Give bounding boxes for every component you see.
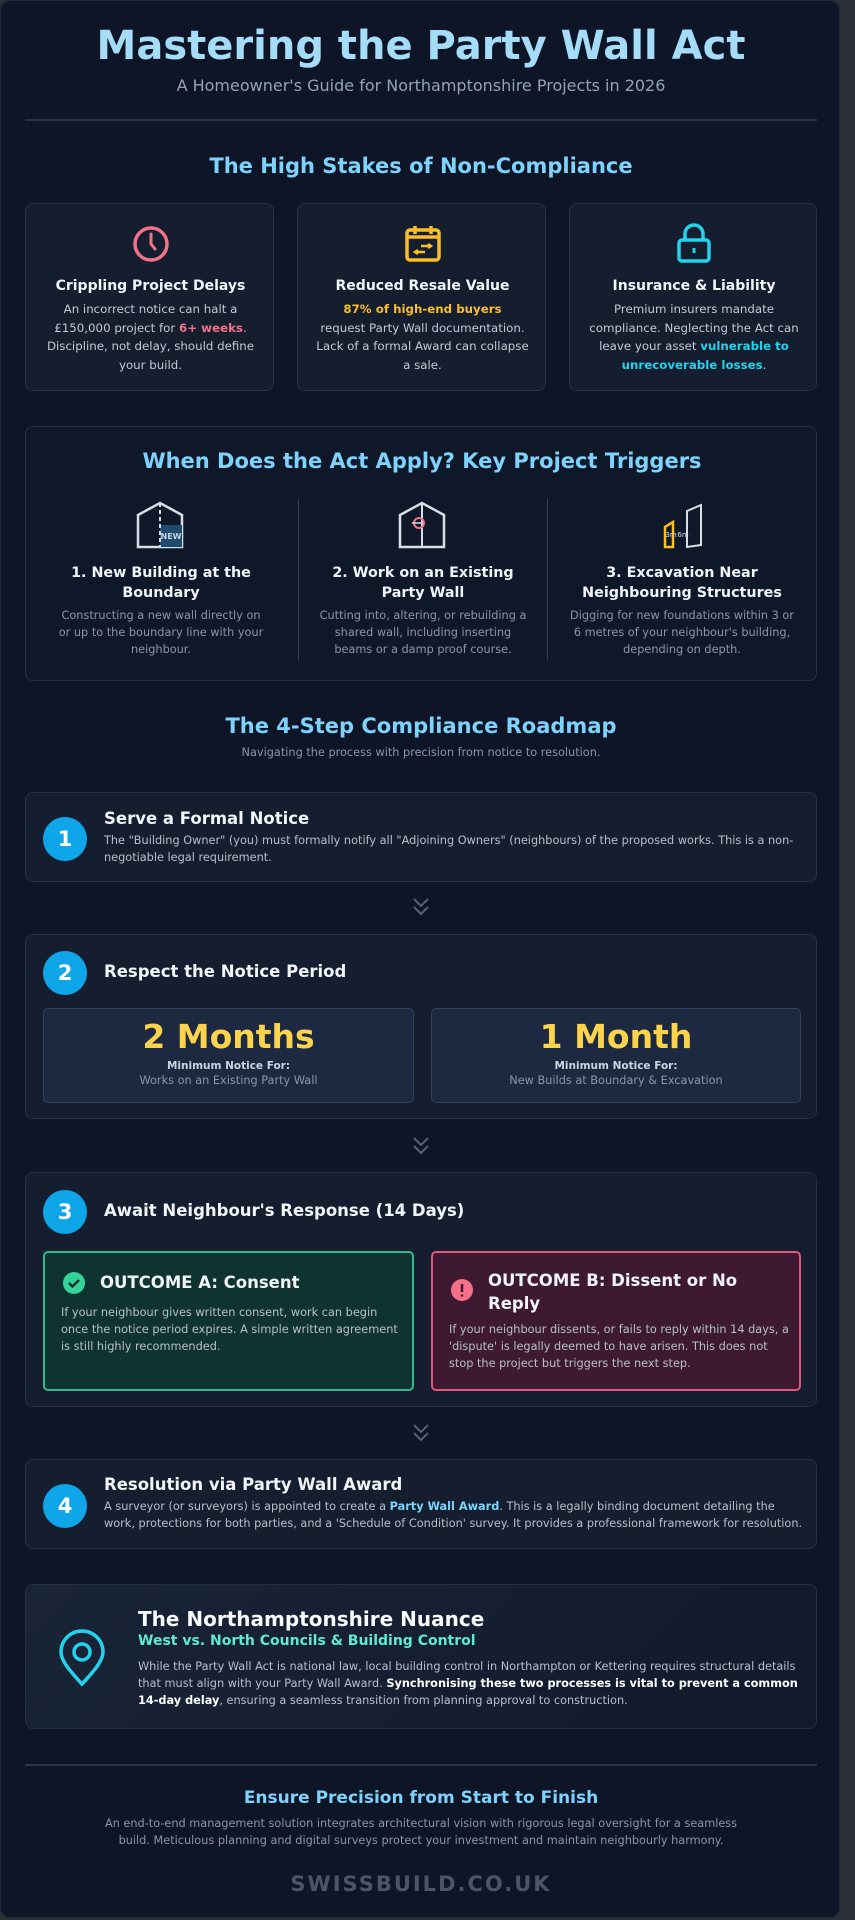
closing text: An end-to-end management solution integrates architectural vision with rigorous legal oversight for a seamless build. Meticulous planning and digital surveys protect your investment and maintain neighbourly harmony. (105, 1817, 737, 1847)
step 1 (25, 792, 817, 882)
step 2 (25, 934, 817, 1119)
icon: padlock (677, 223, 711, 263)
panel: resale: request Party Wall documentation. Lack of a formal Award can collapse a sale. (316, 320, 529, 372)
heading: roadmap: The 4-Step Compliance Roadmap (225, 714, 617, 738)
outcome B (431, 1251, 801, 1391)
icon: new building (136, 502, 184, 548)
panel: resale (297, 203, 546, 391)
trigger 2: 2. Work on an Existing Party Wall (332, 565, 514, 601)
panel: resale: 87% of high-end buyers (343, 302, 502, 316)
trigger 3: 3. Excavation Near Neighbouring Structures (582, 565, 782, 601)
icon: alert (451, 1279, 473, 1301)
heading: triggers: When Does the Act Apply? Key Project Triggers (142, 449, 702, 473)
panel: insurance: Premium insurers mandate compliance. Neglecting the Act can leave your asset vulnerable to unrecoverable losses. (589, 302, 799, 372)
icon: clock (133, 226, 169, 262)
trigger 1: Constructing a new wall directly on or up to the boundary line with your neighbour. (59, 609, 263, 656)
step 3: Await Neighbour's Response (14 Days) (104, 1201, 464, 1220)
arrow (413, 898, 429, 916)
panel: northamptonshire nuance: While the Party Wall Act is national law, local building control in Northampton or Kettering requires structural details that must align with your Party Wall Award. Synchronising these two processes is vital to prevent a common 14-day delay, ensuring a seamless transition from planning approval to construction. (138, 1660, 798, 1707)
trigger 3 (570, 504, 794, 656)
step 4: Resolution via Party Wall Award (104, 1475, 402, 1494)
trigger 2 (320, 502, 526, 656)
step 2: Respect the Notice Period (104, 962, 346, 981)
outcome B: OUTCOME B: Dissent or No Reply (488, 1271, 737, 1313)
panel: delays: Crippling Project Delays (56, 278, 245, 294)
icon: excavation (664, 504, 702, 548)
step 1: The "Building Owner" (you) must formally notify all "Adjoining Owners" (neighbours) of the proposed works. This is a non-negotiable legal requirement. (104, 834, 793, 864)
panel: insurance: Insurance & Liability (613, 278, 775, 294)
stat: 2 months: 2 Months (142, 1017, 315, 1056)
icon: calendar (405, 226, 441, 262)
stat: 2 months (43, 1008, 414, 1103)
step 4 (25, 1459, 817, 1549)
outcome B: If your neighbour dissents, or fails to reply within 14 days, a 'dispute' is legally deemed to have arisen. This does not stop the project but triggers the next step. (449, 1323, 789, 1370)
panel: delays: An incorrect notice can halt a £150,000 project for 6+ weeks. Discipline, not delay, should define your build. (47, 302, 254, 372)
icon: check (63, 1272, 85, 1294)
step 1: 1 (58, 827, 72, 851)
icon: map pin (59, 1629, 105, 1686)
step 3: 3 (58, 1200, 72, 1224)
step 4: A surveyor (or surveyors) is appointed to create a Party Wall Award. This is a legally binding document detailing the work, protections for both parties, and a 'Schedule of Condition' survey. It provides a professional framework for resolution. (104, 1500, 802, 1530)
outcome A: OUTCOME A: Consent (100, 1273, 300, 1292)
step 4: 4 (58, 1494, 72, 1518)
trigger 2: Cutting into, altering, or rebuilding a shared wall, including inserting beams or a damp proof course. (320, 609, 526, 656)
trigger 3: Digging for new foundations within 3 or 6 metres of your neighbour's building, depending on depth. (570, 609, 794, 656)
icon: excavation: 6m (677, 531, 689, 539)
trigger 1 (59, 502, 264, 656)
stat: 2 months: Minimum Notice For: (167, 1060, 290, 1072)
panel: triggers (25, 426, 817, 681)
panel: resale: Reduced Resale Value (336, 278, 509, 294)
trigger 1: 1. New Building at the Boundary (71, 565, 251, 601)
panel: delays (25, 203, 274, 391)
icon: new building: NEW (161, 532, 182, 541)
icon: party wall (398, 502, 446, 548)
panel: northamptonshire nuance: West vs. North Councils & Building Control (138, 1633, 476, 1649)
arrow (413, 1137, 429, 1154)
outcome A: If your neighbour gives written consent, work can begin once the notice period expires. A simple written agreement is still highly recommended. (61, 1306, 398, 1353)
stat: 1 month: New Builds at Boundary & Excavation (509, 1074, 723, 1087)
stat: 1 month (431, 1008, 801, 1103)
roadmap subtitle: Navigating the process with precision from notice to resolution. (242, 746, 600, 759)
panel: insurance (569, 203, 817, 391)
step 1: Serve a Formal Notice (104, 809, 309, 828)
panel: northamptonshire nuance (25, 1584, 817, 1729)
stat: 2 months: Works on an Existing Party Wall (140, 1074, 317, 1087)
outcome A (43, 1251, 414, 1391)
step 3 (25, 1172, 817, 1407)
stat: 1 month: 1 Month (540, 1017, 692, 1056)
arrow (413, 1424, 429, 1442)
title: Mastering the Party Wall Act (97, 23, 745, 69)
stat: 1 month: Minimum Notice For: (554, 1060, 678, 1072)
step 2: 2 (58, 961, 72, 985)
heading: high stakes: The High Stakes of Non-Compliance (209, 154, 633, 178)
panel: northamptonshire nuance: The Northamptonshire Nuance (138, 1607, 484, 1631)
icon: excavation: 3m (665, 531, 677, 539)
heading: ensure precision: Ensure Precision from Start to Finish (244, 1788, 598, 1808)
subtitle: A Homeowner's Guide for Northamptonshire Projects in 2026 (177, 76, 665, 95)
footer brand: SWISSBUILD.CO.UK (290, 1872, 552, 1896)
